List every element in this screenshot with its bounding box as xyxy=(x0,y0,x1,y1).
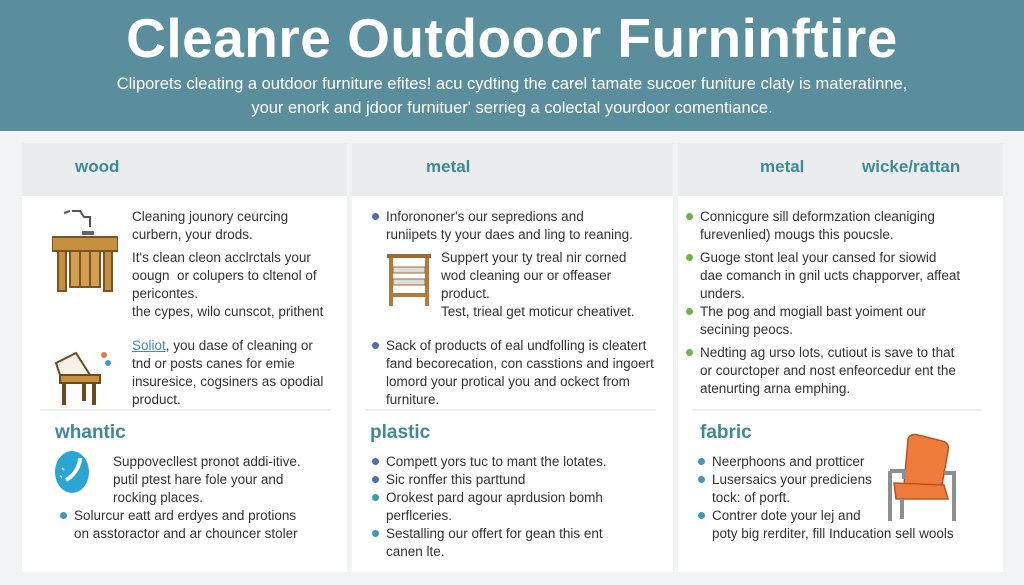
panel: metal xyxy=(352,143,673,572)
text block: wood bottom: Soliot, you dase of cleaning or xyxy=(132,338,313,353)
bullets: plastic: Compett yors tuc to mant the lotates. xyxy=(386,454,607,469)
bullets: fabric: poty big rerditer, fill Inducation sell wools xyxy=(712,526,954,541)
bullets: wicker: The pog and mogiall bast yoiment our xyxy=(700,304,926,319)
bullet: whantic: Solurcur eatt ard erdyes and protions xyxy=(74,508,296,523)
text block: whantic: putil ptest hare fole your and xyxy=(113,472,283,487)
icon: wooden shelf xyxy=(387,254,431,306)
text block: whantic xyxy=(113,454,301,505)
subtitle: Cliporets cleating a outdoor furniture efites! acu cydting the carel tamate sucoer funiture claty is materatinne, xyxy=(117,75,907,93)
text block: wood bottom: insuresice, cogsiners as opodial xyxy=(132,374,323,389)
text block: wood top: oougn or colupers to cltenol of xyxy=(132,268,317,283)
divider xyxy=(366,409,656,411)
bullets: wicker: furevenlied) mougs this poucsle. xyxy=(700,227,894,242)
bullets: fabric: Lusersaics your prediciens xyxy=(712,472,872,487)
bullet: metal 2: Sack of products of eal undfolling is cleatert xyxy=(386,338,646,353)
bullets: fabric: Contrer dote your lej and xyxy=(712,508,861,523)
divider xyxy=(692,409,982,411)
bullet: whantic xyxy=(58,507,348,543)
bullets: plastic: canen lte. xyxy=(386,544,445,559)
bullet: metal 2: lomord your protical you and ockect from xyxy=(386,374,630,389)
heading: plastic: plastic xyxy=(370,422,430,443)
header band xyxy=(0,0,1024,131)
bullets: wicker: or courctoper and nost enfeorcedur ent the xyxy=(700,363,956,378)
heading: whantic: whantic xyxy=(55,422,126,443)
bullet: whantic: on asstoractor and ar chouncer stoler xyxy=(74,526,298,541)
heading: metal wicker/rattan: metal xyxy=(760,157,804,176)
bullets: wicker: Guoge stont leal your cansed for siowid xyxy=(700,250,936,265)
bullet: metal 2 xyxy=(370,337,673,409)
icon: orange chair xyxy=(888,434,956,521)
heading: wood: wood xyxy=(75,157,119,176)
bullet: metal 1: Inforononer's our sepredions and xyxy=(386,209,584,224)
text block: metal middle: product. xyxy=(441,286,490,301)
bullets: plastic: Sic ronffer this parttund xyxy=(386,472,525,487)
bullet: metal 2: fand becorecation, con casstions and ingoert xyxy=(386,356,654,371)
bullets: plastic: perflceries. xyxy=(386,508,452,523)
panel: wicker/rattan xyxy=(678,143,1003,572)
heading: metal wicker/rattan xyxy=(678,143,1003,196)
bullet: metal 2: furniture. xyxy=(386,392,439,407)
bullets: fabric: tock: of porft. xyxy=(712,490,790,505)
icon: lounge chair xyxy=(54,352,111,405)
text block: metal middle: wod cleaning our or offeaser xyxy=(441,268,611,283)
bullets: wicker: Nedting ag urso lots, cutiout is save to that xyxy=(700,345,954,360)
panel: wood xyxy=(22,143,347,572)
bullets: wicker: unders. xyxy=(700,286,745,301)
text block: metal middle xyxy=(441,250,635,319)
bullet: metal 1 xyxy=(370,208,670,244)
heading: metal xyxy=(352,143,673,196)
bullets: fabric xyxy=(698,454,954,541)
divider xyxy=(40,409,330,411)
bullet: metal 1: runiipets ty your daes and ling to reaning. xyxy=(386,227,633,242)
heading: metal: metal xyxy=(426,157,470,176)
text block: wood top: pericontes. xyxy=(132,286,198,301)
heading: wood xyxy=(22,143,347,196)
icon: wooden table xyxy=(52,210,118,292)
bullets: wicker: secining peocs. xyxy=(700,322,793,337)
subtitle xyxy=(117,75,907,117)
text block: wood top: Cleaning jounory ceurcing xyxy=(132,209,288,224)
text block: wood top: curbern, your drods. It's clean cleon acclrctals your xyxy=(132,227,311,265)
text block: metal middle: Suppert your ty treal nir corned xyxy=(441,250,626,265)
heading: fabric: fabric xyxy=(700,422,752,443)
heading: metal wicker/rattan: wicke/rattan xyxy=(862,157,960,176)
bullets: plastic: Sestalling our offert for gean this ent xyxy=(386,526,603,541)
text block: wood bottom: tnd or posts canes for emie xyxy=(132,356,295,371)
bullets: wicker xyxy=(686,209,960,396)
text block: wood bottom: product. xyxy=(132,392,181,407)
text block: wood bottom xyxy=(132,338,323,407)
bullets: wicker: atenurting arna emphing. xyxy=(700,381,850,396)
bullets: plastic xyxy=(372,454,607,559)
bullets: wicker: dae comanch in gnil ucts chapporver, affeat xyxy=(700,268,960,283)
text block: wood top xyxy=(132,209,324,319)
bullets: plastic: Orokest pard agour aprdusion bomh xyxy=(386,490,603,505)
bullets: wicker: Connicgure sill deformzation cleaniging xyxy=(700,209,935,224)
text block: wood top: the cypes, wilo cunscot, prithent xyxy=(132,304,323,319)
title: Cleanre Outdooor Furninftire xyxy=(126,7,898,69)
icon: blue circle xyxy=(55,451,89,493)
bullets: fabric: Neerphoons and protticer xyxy=(712,454,864,469)
subtitle: your enork and jdoor furnituer' serrieg a colectal yourdoor comentiance. xyxy=(251,99,773,117)
text block: whantic: Suppovecllest pronot addi-itive. xyxy=(113,454,301,469)
text block: metal middle: Test, trieal get moticur cheativet. xyxy=(441,304,635,319)
text block: whantic: rocking places. xyxy=(113,490,203,505)
